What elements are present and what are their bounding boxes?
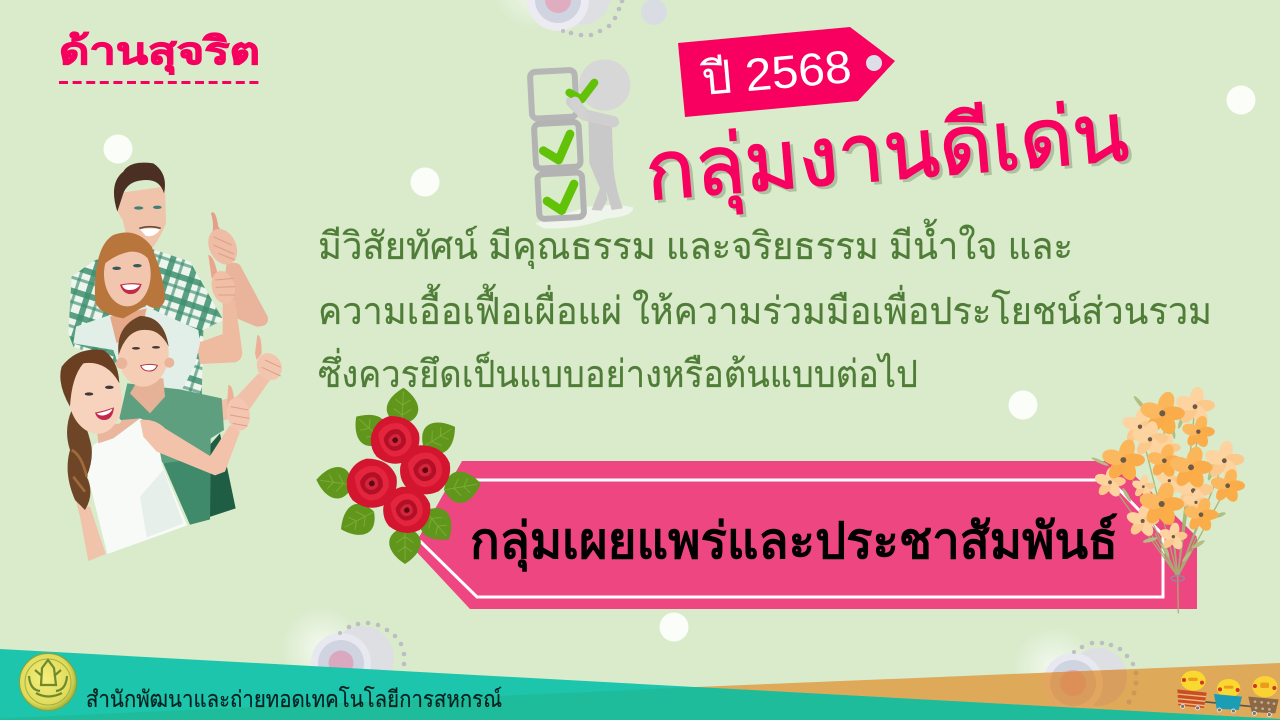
duck cart 1 bbox=[1177, 671, 1207, 710]
duck cart 2 bbox=[1214, 679, 1242, 713]
body text: ความเอื้อเฟื้อเผื่อแผ่ ให้ความร่วมมือเพื่อประโยชน์ส่วนรวม bbox=[318, 283, 1212, 333]
banner: กลุ่มเผยแพร่และประชาสัมพันธ์ bbox=[470, 513, 1118, 572]
decoration: footer discs bbox=[280, 606, 1135, 713]
girl bbox=[60, 350, 253, 561]
duck cart 3 bbox=[1248, 676, 1279, 717]
body text: ซึ่งควรยึดเป็นแบบอย่างหรือต้นแบบต่อไป bbox=[318, 348, 918, 396]
boy bbox=[116, 316, 287, 525]
heading: กลุ่มงานดีเด่น: กลุ่มงานดีเด่น bbox=[642, 87, 1132, 222]
illustration: orange flower bouquet bbox=[1091, 386, 1245, 613]
illustration: red roses bbox=[314, 387, 484, 564]
decoration: white dots bbox=[104, 86, 1256, 642]
footer band bbox=[0, 648, 1280, 720]
box 1 bbox=[530, 70, 577, 119]
heading: กลุ่มงานดีเด่น: กลุ่มงานดีเด่น bbox=[645, 89, 1135, 225]
body text: มีวิสัยทัศน์ มีคุณธรรม และจริยธรรม มีน้ำใจ และ bbox=[318, 218, 1073, 269]
heading: ด้านสุจริต: ด้านสุจริต bbox=[59, 31, 260, 75]
man bbox=[68, 163, 268, 397]
footer text: สำนักพัฒนาและถ่ายทอดเทคโนโลยีการสหกรณ์ bbox=[86, 686, 502, 712]
shadow bbox=[535, 205, 633, 229]
person bbox=[569, 59, 630, 211]
banner bbox=[413, 461, 1197, 609]
tag: ปี 2568 bbox=[678, 27, 895, 117]
box 3 bbox=[537, 172, 584, 219]
illustration: figure with checkboxes bbox=[530, 59, 633, 229]
decoration: top discs bbox=[490, 0, 667, 37]
tag: ปี 2568: ปี 2568 bbox=[698, 40, 853, 105]
logo seal bbox=[20, 654, 76, 710]
illustration: family with thumbs up bbox=[60, 163, 287, 561]
woman bbox=[73, 233, 242, 393]
box 2 bbox=[534, 122, 581, 169]
illustration: ducks in carts bbox=[1177, 671, 1279, 717]
body text bbox=[318, 218, 1212, 396]
